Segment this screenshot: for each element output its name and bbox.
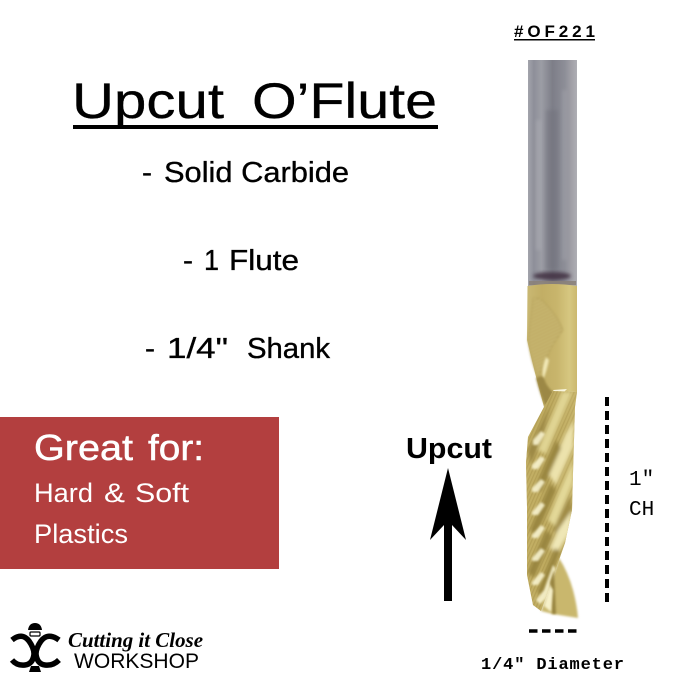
router bit photo bbox=[526, 60, 580, 620]
feature: solid carbide: - bbox=[142, 157, 152, 189]
logo workshop text: WORKSHOP bbox=[74, 650, 199, 673]
feature: 1/4 inch shank: - bbox=[145, 333, 155, 365]
shank bbox=[528, 60, 577, 286]
panel heading: for: bbox=[148, 427, 204, 468]
title: Upcut bbox=[72, 73, 224, 129]
panel text: Plastics bbox=[34, 519, 128, 549]
upcut label: Upcut bbox=[406, 433, 492, 465]
part number: #OF221 bbox=[514, 22, 595, 41]
logo icon bbox=[12, 623, 59, 672]
diameter label: 1/4" Diameter bbox=[481, 656, 624, 675]
length dimension line bbox=[605, 397, 609, 606]
diameter dimension line bbox=[529, 629, 577, 633]
feature: 1/4 inch shank: Shank bbox=[247, 333, 330, 365]
logo bbox=[12, 623, 203, 673]
logo script text: Cutting it Close bbox=[68, 628, 203, 652]
feature: 1/4 inch shank: 1/4" bbox=[167, 333, 228, 365]
feature: 1 flute: 1 bbox=[204, 245, 219, 277]
panel: great for bbox=[0, 417, 279, 569]
feature: 1 flute bbox=[183, 245, 299, 277]
length label: 1" bbox=[629, 469, 654, 492]
feature: 1/4 inch shank bbox=[145, 333, 330, 365]
feature: 1 flute: - bbox=[183, 245, 193, 277]
title: O’Flute bbox=[252, 73, 437, 129]
panel heading bbox=[34, 427, 204, 468]
arrow: upward direction bbox=[430, 468, 466, 601]
feature: solid carbide: Solid Carbide bbox=[164, 157, 349, 189]
title bbox=[72, 73, 438, 129]
feature: 1 flute: Flute bbox=[229, 245, 299, 277]
spiral flute section bbox=[526, 391, 577, 611]
gold cylinder section bbox=[527, 284, 577, 407]
panel text: Soft bbox=[135, 478, 190, 508]
panel text bbox=[34, 478, 190, 549]
panel heading: Great bbox=[34, 427, 133, 468]
panel text: & bbox=[104, 478, 125, 508]
cutting tip bbox=[541, 558, 578, 618]
length label bbox=[629, 469, 654, 522]
panel text: Hard bbox=[34, 478, 93, 508]
length label: CH bbox=[629, 499, 654, 522]
